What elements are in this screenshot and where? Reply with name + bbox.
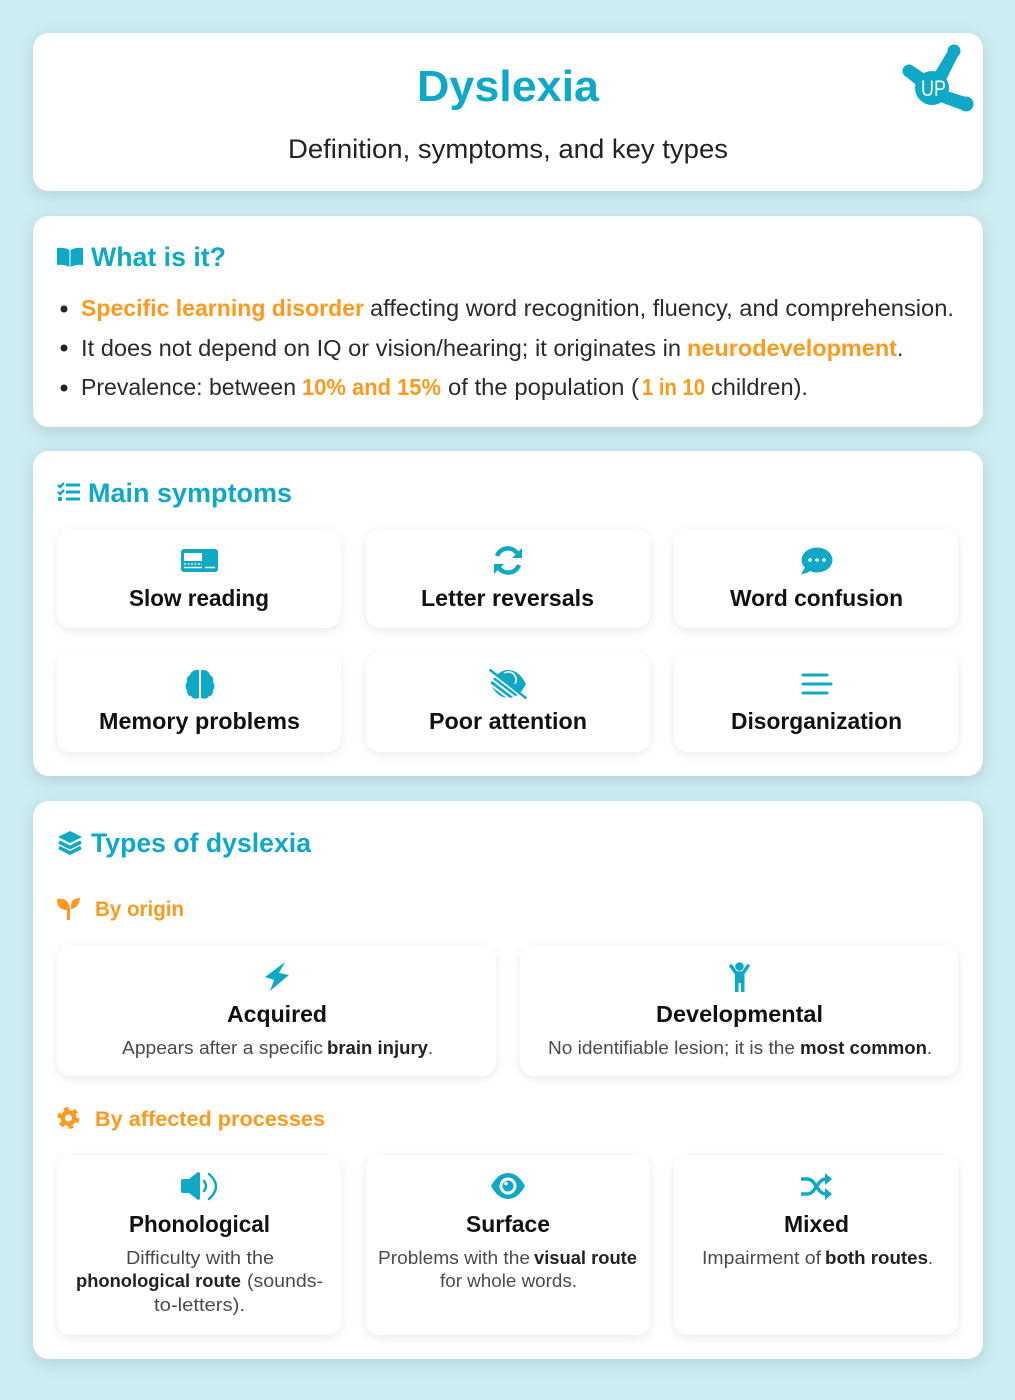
card: acquired: Appears after a specific: [122, 1038, 323, 1058]
bullet: definition: Specific learning disorder: [81, 295, 364, 321]
card: surface: Surface: [466, 1211, 550, 1237]
card: phonological: (sounds-: [247, 1271, 323, 1291]
card: slow reading: [57, 529, 341, 628]
card: phonological: to-letters).: [154, 1295, 245, 1315]
bullet: origin: It does not depend on IQ or vision/hearing; it originates in: [81, 335, 681, 361]
card: word confusion: Word confusion: [730, 585, 903, 611]
heading: types of dyslexia: Types of dyslexia: [91, 828, 312, 858]
card: phonological: Phonological: [129, 1211, 270, 1237]
icon: bolt: [265, 962, 289, 991]
card: acquired: Acquired: [227, 1001, 327, 1027]
card: mixed: [674, 1155, 958, 1335]
icon: UP logo: UP: [921, 76, 946, 101]
subheading: by origin: By origin: [95, 897, 184, 921]
card: developmental: No identifiable lesion; it is the: [548, 1038, 795, 1058]
icon: shuffle: [801, 1173, 832, 1200]
icon: speaker: [181, 1172, 216, 1200]
card: developmental: .: [927, 1038, 932, 1058]
icon: reading card: [181, 549, 218, 572]
card: mixed: Mixed: [784, 1211, 849, 1237]
bullet: origin: .: [897, 335, 903, 361]
card: memory problems: [57, 653, 341, 752]
icon: sync arrows: [494, 548, 522, 574]
card: surface: visual route: [534, 1248, 637, 1268]
card: acquired: [57, 945, 496, 1076]
title: Dyslexia: [417, 62, 600, 111]
panel: types of dyslexia: [33, 801, 983, 1359]
card: mixed: both routes: [825, 1248, 928, 1268]
card: mixed: Impairment of: [702, 1248, 822, 1268]
bullet: origin: neurodevelopment: [687, 335, 897, 361]
card: acquired: brain injury: [327, 1038, 428, 1058]
bullet: definition: affecting word recognition, fluency, and comprehension.: [370, 295, 954, 321]
icon: layers: [58, 831, 82, 853]
card: memory problems: Memory problems: [99, 708, 300, 734]
card: acquired: .: [428, 1038, 433, 1058]
icon: UP logo: [902, 44, 974, 112]
card: poor attention: Poor attention: [429, 708, 587, 734]
bullet: prevalence: Prevalence: between: [81, 374, 296, 400]
card: surface: [366, 1155, 650, 1335]
card: phonological: Difficulty with the: [126, 1248, 274, 1268]
bullet: definition: [60, 295, 954, 321]
panel: header: [33, 33, 983, 191]
icon: uneven bars: [803, 675, 831, 693]
bullet: prevalence: 10% and 15%: [302, 374, 441, 400]
icon: gear: [60, 1109, 78, 1127]
heading: main symptoms: Main symptoms: [88, 478, 292, 508]
card: disorganization: Disorganization: [731, 708, 902, 734]
icon: checklist: [58, 483, 80, 501]
icon: child: [731, 962, 748, 992]
card: developmental: most common: [800, 1038, 927, 1058]
card: surface: Problems with the: [378, 1248, 530, 1268]
bullet: origin: [60, 335, 903, 361]
card: letter reversals: Letter reversals: [421, 585, 594, 611]
icon: crossed eye: [480, 670, 526, 705]
panel: what is it: [33, 216, 983, 427]
card: phonological: [57, 1155, 341, 1335]
subheading: by affected processes: By affected processes: [95, 1107, 325, 1131]
bullet: prevalence: 1 in 10: [642, 374, 705, 400]
card: developmental: [520, 945, 958, 1076]
card: letter reversals: [366, 529, 650, 628]
card: disorganization: [674, 653, 958, 752]
icon: seedling: [57, 898, 80, 920]
icon: speech bubble: [801, 548, 832, 574]
card: developmental: Developmental: [656, 1001, 823, 1027]
bullet: prevalence: of the population (: [448, 374, 639, 400]
card: word confusion: [674, 529, 958, 628]
icon: eye: [491, 1173, 525, 1199]
subtitle: Definition, symptoms, and key types: [288, 134, 728, 164]
bullet: prevalence: children).: [711, 374, 808, 400]
card: phonological: phonological route: [76, 1271, 241, 1291]
heading: what is it: What is it?: [91, 242, 226, 272]
card: surface: for whole words.: [440, 1271, 577, 1291]
icon: brain: [186, 670, 214, 699]
icon: open book: [57, 248, 83, 267]
card: mixed: .: [928, 1248, 933, 1268]
card: poor attention: [366, 653, 650, 752]
card: slow reading: Slow reading: [129, 585, 269, 611]
panel: main symptoms: [33, 451, 983, 776]
bullet: prevalence: [60, 374, 808, 400]
